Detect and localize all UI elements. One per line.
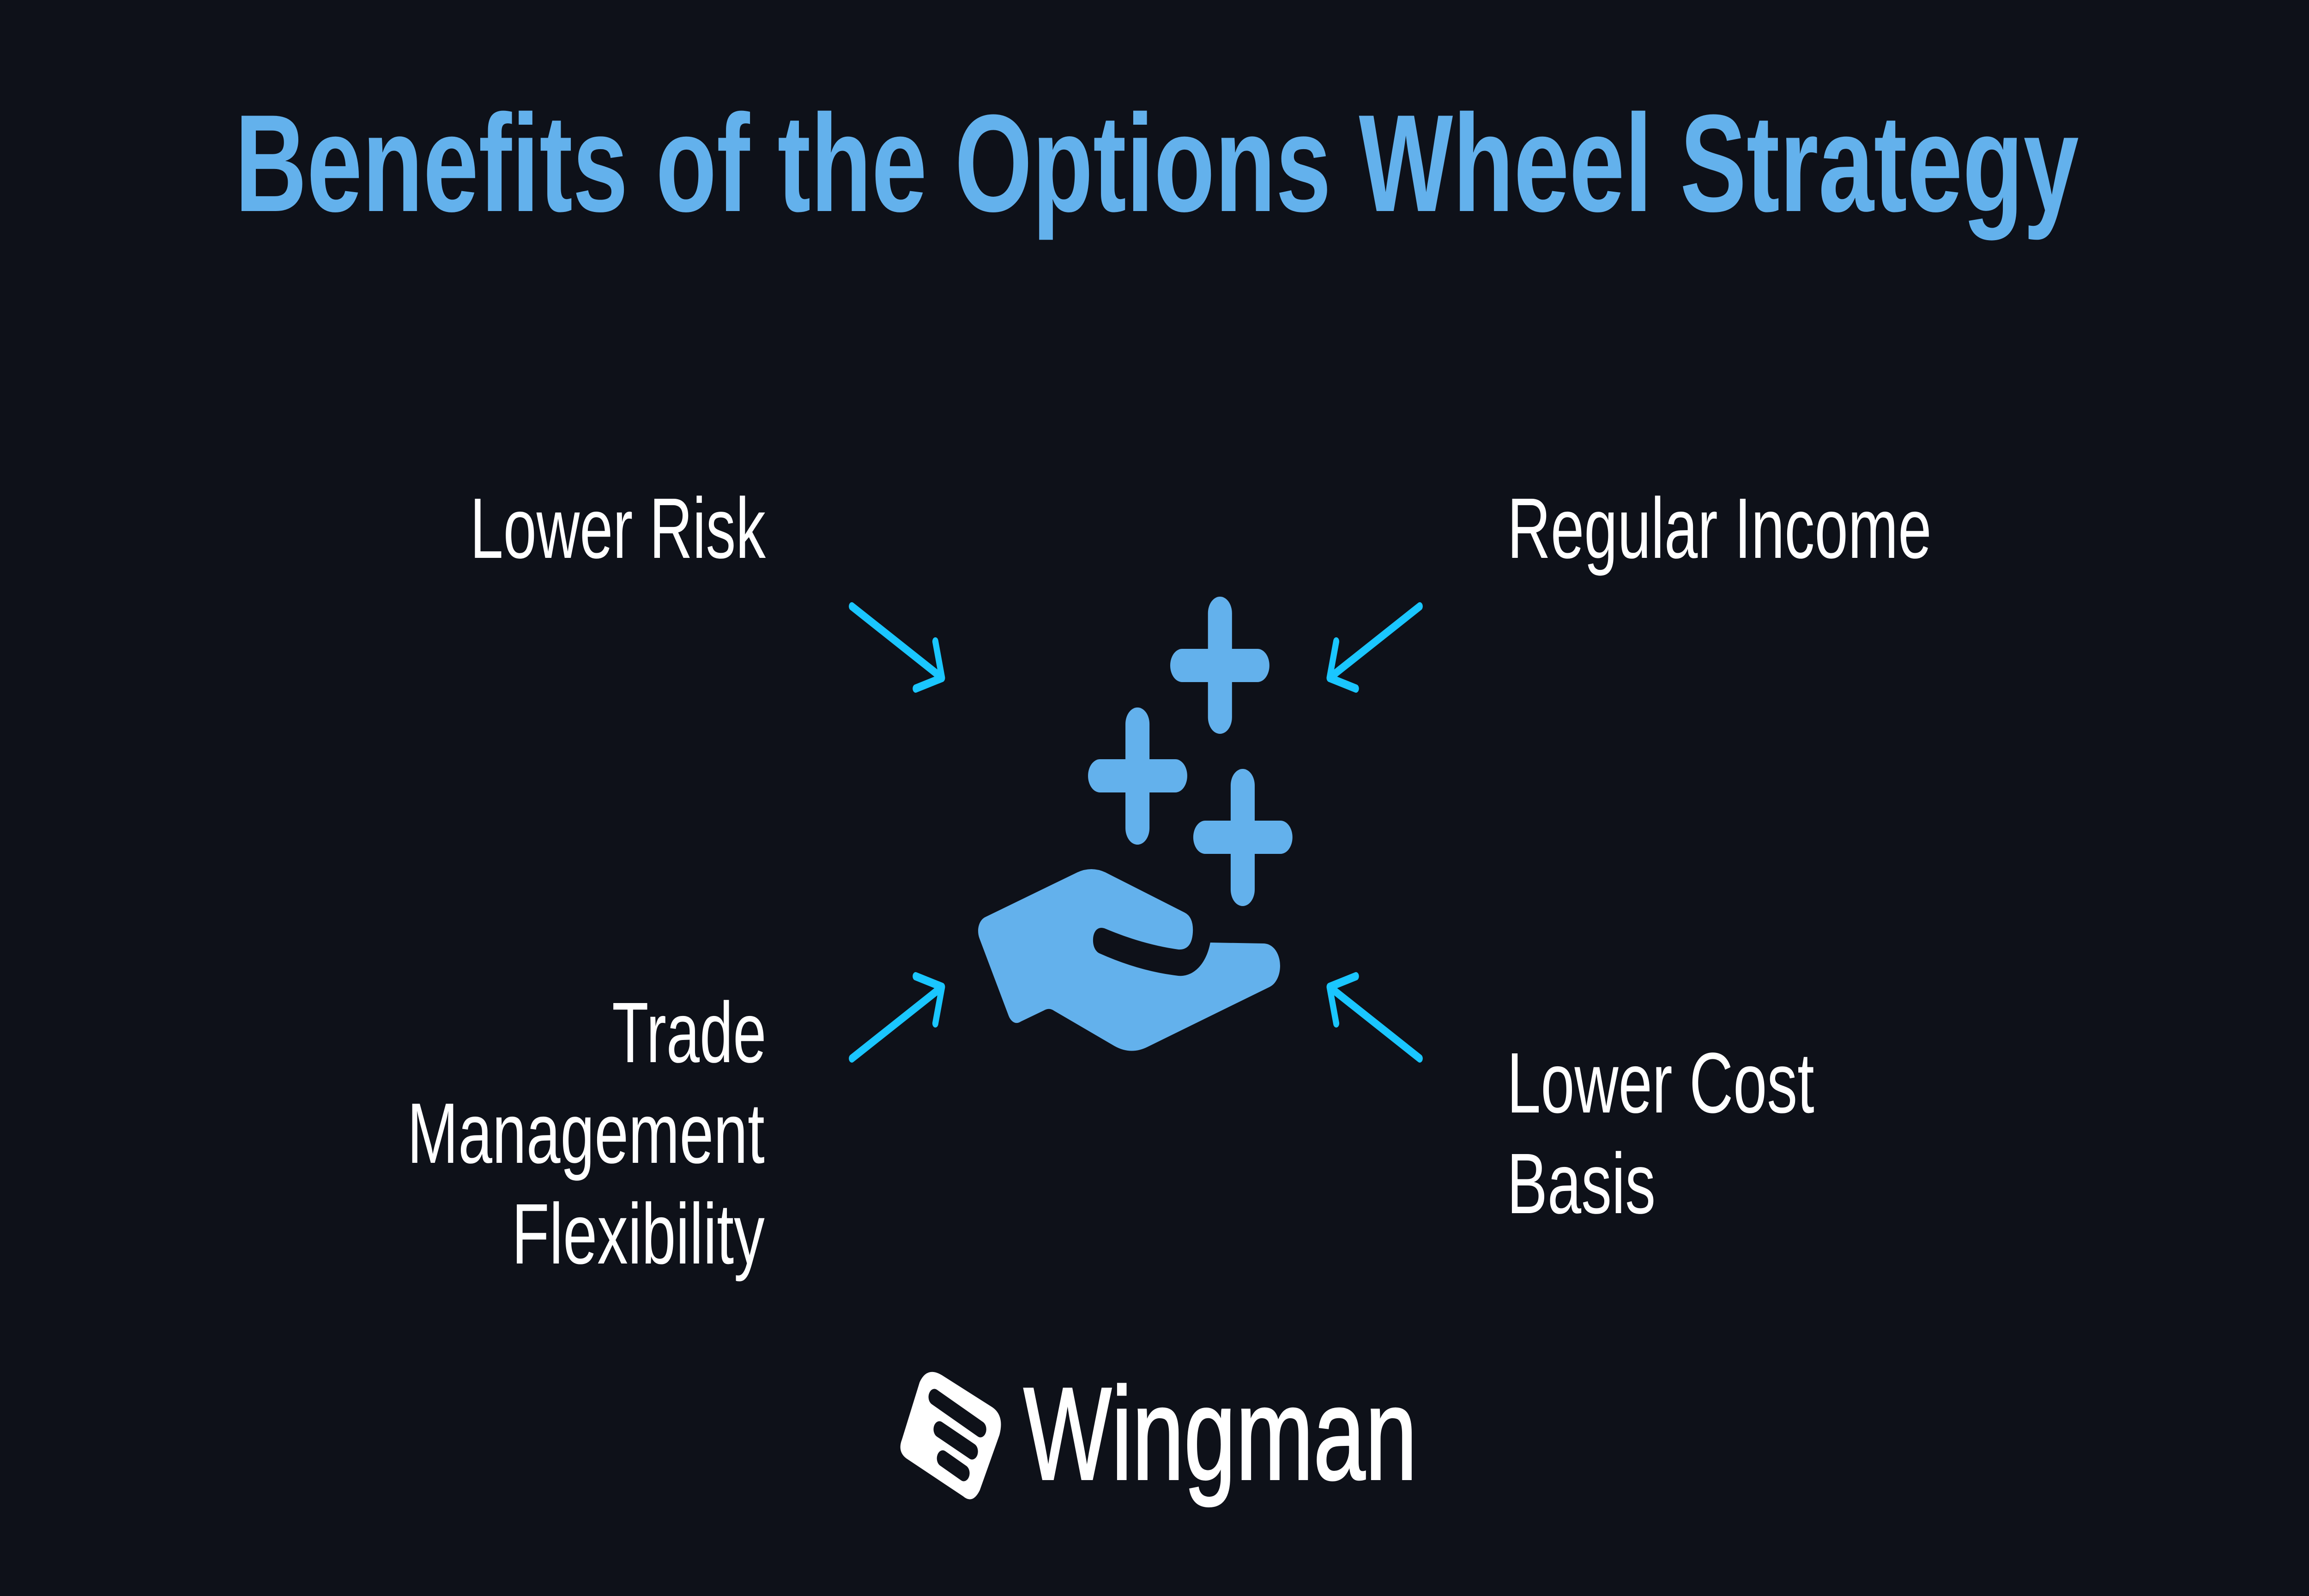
icon: plus sign left	[1088, 707, 1187, 845]
icon: plus sign top	[1170, 597, 1269, 734]
label: Lower Risk: Lower Risk	[470, 481, 766, 576]
label: Trade Management Flexibility: Flexibility	[512, 1186, 765, 1282]
arrow: bottom right	[1330, 976, 1420, 1058]
label: Trade Management Flexibility: Management	[407, 1086, 765, 1181]
title: Benefits of the Options Wheel Strategy	[235, 86, 2079, 242]
icon: plus sign right	[1193, 769, 1293, 906]
label: Lower Cost Basis: Lower Cost	[1507, 1035, 1814, 1131]
label: Lower Cost Basis: Basis	[1507, 1136, 1656, 1232]
icon: Wingman mark	[901, 1372, 1001, 1499]
arrow: top right	[1330, 606, 1420, 689]
label: Trade Management Flexibility	[407, 985, 766, 1282]
icon: hand with plus signs	[978, 597, 1293, 1051]
logo wordmark: Wingman	[1023, 1360, 1417, 1507]
arrow: top left	[852, 606, 942, 689]
label: Lower Cost Basis	[1507, 1035, 1814, 1232]
label: Trade Management Flexibility: Trade	[612, 985, 766, 1081]
label: Regular Income: Regular Income	[1507, 481, 1932, 576]
icon: open hand	[978, 869, 1280, 1051]
arrow: bottom left	[852, 976, 942, 1058]
logo: Wingman	[901, 1360, 1417, 1507]
